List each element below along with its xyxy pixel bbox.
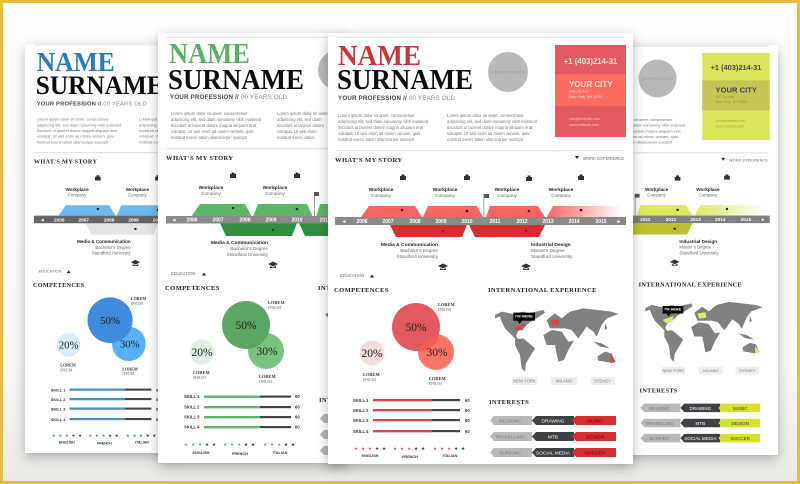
education label [679,239,719,255]
workplace labels: Company [128,193,147,198]
skill bars: SKILL 1 [51,387,66,392]
timeline: 2006 [186,218,198,224]
language ratings: ENGLISH [193,451,210,455]
name heading: NAME [37,47,115,77]
biography text: nostrud exerci tation ullamcorper suscipit [447,137,524,142]
heading: competences: COMPETENCES [334,287,389,294]
timeline: 2009 [265,218,277,224]
contact box: YOUR CITY [569,80,613,89]
skill bars: SKILL 3 [353,418,369,423]
photo placeholder [488,52,528,92]
language ratings: ENGLISH [362,454,379,458]
timeline: 2011 [320,218,331,224]
photo placeholder [318,52,328,88]
workplace labels: Workplace [66,187,89,192]
language ratings [184,442,295,456]
language ratings: ★★★ [223,442,241,448]
workplace labels: Workplace [369,187,394,193]
skill bars: 60 [465,398,470,403]
workplace labels [199,185,288,196]
biography text: volutpat. Ut wisi enim ad minim veniam, quis [37,134,114,139]
language ratings: ★★★ [433,446,451,452]
icon: graduation hat [670,260,679,266]
timeline: 2010 [461,219,473,225]
interest tags: SOCIAL MEDIA [536,450,571,456]
bubble chart: 20% [191,347,213,359]
education legend: EDUCATION [39,269,62,274]
skill bars: 60 [156,417,161,422]
interest tags: TRAVELLING [646,421,674,426]
world map: I'M HERE [664,308,682,312]
skill bars: 60 [295,404,300,410]
bubble chart: IPSUM [429,381,442,386]
workplace labels: Company [551,193,572,198]
interest tags: DESIGN [732,421,749,426]
bubble chart: IPSUM [60,367,73,372]
timeline: ◄ [172,218,176,224]
skill bars: SKILL 2 [51,397,66,402]
language ratings: ★★★ [354,446,372,452]
biography text: nostrud exerci tation ullamcorper suscipit [338,137,415,142]
timeline: 2006 [54,217,65,223]
surname heading: SURNAME [36,70,164,100]
bubble chart: LOREM [193,370,210,375]
location chips [661,367,759,374]
heading: what's my story: WHAT'S MY STORY [166,155,234,162]
bubble chart: 50% [100,315,120,327]
skill bars: SKILL 2 [353,408,369,413]
biography text [171,111,328,140]
biography text: adipiscing elit, sed [139,122,171,127]
education label: Bachelor's Degree [95,245,131,250]
contact box: info@website.com [569,117,600,121]
biography text: adipiscing elit, sed diam nonummy nibh euismod [338,119,429,124]
bubble chart: 30% [256,346,278,358]
photo placeholder: YOUR PHOTO HERE [491,70,526,74]
contact box: +1 (403)214-31 [564,57,618,66]
bubble chart: IPSUM [438,307,451,312]
location chips: NEW YORK [662,368,684,373]
timeline: 2011 [490,219,501,225]
contact box [702,53,770,140]
interest tags: SOCCER [585,450,606,456]
skill bars: 60 [156,406,161,411]
workplace labels: Workplace [126,187,149,192]
skill bars [51,387,161,422]
language ratings: ★★★ [393,446,411,452]
language ratings: ★★ [414,446,425,452]
education label: Industrial Design [679,239,717,244]
interest tags: SOCCER [731,436,751,441]
world map [645,302,762,362]
language ratings: FRENCH [232,452,248,456]
timeline: 2013 [542,219,554,225]
skill bars: 60 [465,429,470,434]
education legend [171,271,206,276]
icon: graduation hat [131,260,140,266]
workplace labels: Workplace [495,187,520,193]
interest tags: DESIGN [586,434,605,440]
workplace labels: Company [435,193,456,198]
timeline: 2011 [640,217,651,223]
contact box: YOUR CITY [716,86,757,95]
biography text: tincidunt ut laoreet dolore magna aliquam erat [447,125,533,130]
education label [211,240,269,257]
biography text: tincidunt ut laoreet dolore magna aliquam erat [338,125,424,130]
bubble chart: IPSUM [193,375,206,380]
language ratings: ★★★ [126,433,143,439]
timeline: 2014 [715,217,726,223]
language ratings: ★★ [375,446,386,452]
workplace labels: Company [201,191,222,196]
contact box: 000 1st Ave [569,90,589,94]
contact box: New York, NY 2000 [716,100,747,104]
workplace labels [645,187,720,198]
skill bars: 60 [295,394,300,399]
profession line: YOUR PROFESSION // 00 YEARS OLD [170,94,287,101]
biography text: nostrud exerci tation ullamcorper suscipit [37,139,109,144]
contact box [555,45,626,137]
panel: blue resume [18,41,158,464]
bubble chart: 20% [361,348,383,360]
biography text: tincidunt ut laoreet dolore magna aliquam erat [600,128,682,133]
interest tags: SOCIAL MEDIA [684,436,717,441]
skill bars: SKILL 4 [51,417,66,422]
heading: international experience: INTERNATIONAL EXPERIENCE [488,287,597,294]
skill bars: SKILL 3 [51,406,66,411]
biography text: volutpat. Ut wisi enim ad minim veniam, quis [171,129,253,134]
language ratings: ★★★ [52,433,69,439]
biography text: Lorem ipsum dolor sit amet [139,117,187,122]
timeline: 2014 [568,219,580,225]
timeline: 2008 [239,218,251,224]
workplace labels: Workplace [549,187,574,193]
world map [495,308,618,372]
name heading: NAME [169,38,250,70]
skill bars: 60 [465,418,470,423]
bubble chart: 50% [405,322,427,334]
bubble chart [57,296,146,376]
education labels [381,242,573,259]
bubble chart: 50% [235,320,257,332]
photo placeholder [639,60,677,97]
biography text: volutpat. Ut wisi enim ad minim veniam, quis [447,131,529,136]
language ratings: ★★★ [88,433,106,439]
location chips: SYDNEY [594,378,611,384]
biography text: volutpat. Ut wisi enim ad minim veniam, quis [600,134,678,139]
education labels: Industrial Design [531,242,571,248]
biography text [338,113,538,142]
interest tags: MTB [696,421,705,426]
heading: competences: COMPETENCES [33,282,85,289]
heading: interests: INTERESTS [640,387,678,394]
biography text: nostrud exerci tation ullamcorper suscipit [600,140,673,145]
bubble chart: IPSUM [131,301,143,306]
language ratings: ITALIAN [273,451,288,455]
timeline: 2008 [409,219,421,225]
language ratings: ENGLISH [59,441,75,445]
biography text: volutpat. Ut wisi enim [277,129,317,134]
bubble chart: IPSUM [363,377,376,382]
workplace labels: Workplace [645,187,669,192]
contact box: New York, NY 2000 [569,95,602,99]
language ratings: ★★ [244,442,255,448]
biography text: Lorem ipsum dolor sit amet, consectetuer [447,113,524,118]
language ratings: ★★★ [184,442,202,448]
education label: Media & Communication [77,239,131,244]
panel: yellow resume [600,45,778,455]
legend: work experience: WORK EXPERIENCE [729,158,768,163]
location chips: NEW YORK [513,378,536,384]
skill bars: 60 [156,397,161,402]
surname heading: SURNAME [168,65,304,96]
workplace labels: Company [647,193,667,198]
bubble chart: LOREM [429,376,446,381]
education labels: Media & Communication [381,242,438,248]
biography text: tincidunt ut laoreet dolore magna aliquam erat [171,123,257,128]
interest tags: MTB [548,434,558,440]
bubble chart: LOREM [438,302,455,307]
education label [77,239,132,256]
icons: graduation hats [438,264,531,270]
language ratings: FRENCH [97,442,112,446]
legend: work experience: WORK EXPERIENCE [583,156,624,161]
heading: competences: COMPETENCES [165,285,220,292]
skill bars [353,398,470,434]
workplace labels: Workplace [263,185,288,191]
timeline [34,175,158,234]
workplace labels: Company [699,193,718,198]
contact box: www.website.com [569,123,599,127]
location chips: MILANO [703,368,718,373]
education label: Standford University [92,251,132,256]
biography text: adipiscing elit, sed diam nonummy nibh euismod [447,119,538,124]
bubble chart: IPSUM [268,305,281,310]
biography text: adipiscing elit, sed diam nonummy nibh euismod [37,122,121,127]
timeline: ► [761,218,765,223]
interest tags: MUSIC [587,418,603,424]
bubble chart: LOREM [131,296,146,301]
interest tags fragment [320,414,350,455]
education label: Master's Degree [679,245,712,250]
interest tags [640,404,760,442]
language ratings: FRENCH [402,455,418,459]
timeline: 2006 [356,219,368,225]
heading: interests: INTERESTS [489,399,529,406]
skill bars: 60 [295,414,300,420]
language ratings: ★★ [454,446,465,452]
workplace labels [66,187,149,198]
timeline: ► [617,219,621,225]
timeline: 2015 [741,217,752,223]
biography text [633,118,685,144]
education labels: Standford University [531,254,573,259]
photo placeholder: YOUR PHOTO HERE [641,77,675,81]
language ratings: ★★ [205,442,216,448]
location chips [512,377,615,385]
timeline: 2015 [595,219,607,225]
timeline: 2007 [382,219,394,225]
education label: Media & Communication [211,240,268,246]
heading: what's my story: WHAT'S MY STORY [335,157,403,164]
bubble chart: IPSUM [122,371,135,376]
heading: interests (clipped): INTERESTS [319,397,359,404]
biography text: nostrud exerci tation [277,135,315,140]
interest tags: READING [499,418,521,424]
language ratings: ITALIAN [135,441,149,445]
profession line: YOUR PROFESSION // 00 YEARS OLD [338,95,455,102]
skill bars [184,394,300,430]
contact box: 000 1st Ave [716,95,734,99]
contact box: www.website.com [716,125,744,129]
language ratings [52,434,156,444]
surname heading: SURNAME [337,65,473,96]
biography text: tincidunt ut laoreet dolore [277,123,325,128]
timeline: ◄ [342,219,346,225]
legend: work experience [721,158,768,162]
biography text: nostrud exerci tation ullamcorper suscipit [171,135,248,140]
interest tags: DRAWING [541,418,565,424]
education legend: EDUCATION [340,273,364,278]
biography text: volutpat. Ut wisi [139,134,167,139]
heading: what's my story: WHAT'S MY STORY [34,158,97,165]
interest tags: TRAVELLING [495,434,525,440]
education label: Standford University [227,252,269,257]
education labels: Bachelor's Degree [400,248,438,253]
education label: Standford University [679,250,719,255]
timeline: 2007 [212,218,224,224]
interest tags: READING [649,406,670,411]
timeline [335,174,626,237]
timeline [166,172,328,236]
skill bars: SKILL 4 [353,429,369,434]
biography text: Lorem ipsum dolor sit amet, consectetuer [171,111,248,116]
bubble chart [190,300,285,384]
language ratings: ITALIAN [443,454,458,458]
name heading: NAME [338,40,421,72]
biography text: tincidunt ut laoreet dolore magna aliquam erat [37,128,118,133]
timeline: 2013 [690,217,701,223]
panel: red resume [328,33,633,464]
timeline: 2010 [153,217,164,223]
contact box: +1 (403)214-31 [711,63,761,72]
education legend [38,270,70,274]
timeline: 2012 [516,219,528,225]
interest tags [490,416,616,457]
bubble chart: 20% [59,340,79,352]
biography text: adipiscing elit, sed diam nonummy nibh euismod [600,123,685,128]
biography text: volutpat. Ut wisi enim ad minim veniam, quis [338,131,420,136]
bubble chart [360,302,455,386]
bubble chart: LOREM [60,363,76,368]
bubble chart: 30% [120,339,140,351]
timeline: ◄ [40,218,45,223]
timeline: 2009 [128,217,139,223]
bubble chart: LOREM [268,300,285,305]
biography text: tincidunt ut laoreet [139,128,172,133]
language ratings: ★★ [108,433,119,439]
skill bars: 60 [295,424,300,430]
skill bars: 60 [156,387,161,392]
skill bars: 60 [465,408,470,413]
biography text: adipiscing elit, sed diam nonummy nibh euismod [171,117,262,122]
icon: graduation hat [268,262,278,268]
timeline: 2008 [104,217,115,223]
education label: Bachelor's Degree [230,246,268,251]
heading: international (clipped): INTERNATIONAL EXPERIENCE [318,285,427,292]
biography text: Lorem ipsum dolor sit amet, consectetuer [338,113,415,118]
workplace labels [369,187,574,198]
interest tags: SURFING [649,436,670,441]
location chips: SYDNEY [739,368,756,373]
world map: I'M HERE [515,314,533,319]
skill bars: SKILL 1 [184,394,200,399]
skill bars: SKILL 3 [184,414,200,420]
bubble chart: LOREM [363,372,380,377]
interest tags: MUSIC [733,406,748,411]
timeline: 2012 [666,217,677,223]
language ratings [354,446,465,459]
skill bars: SKILL 1 [353,398,369,403]
biography text: nostrud exerci [139,139,164,144]
bubble chart: LOREM [259,374,276,379]
contact box: info@website.com [716,119,745,123]
language ratings: ★★ [284,442,295,448]
location chips: MILANO [556,378,573,384]
language ratings: ★★ [72,433,82,439]
workplace labels: Company [265,191,286,196]
biography text: adipiscing elit, sed diam [277,117,322,122]
language ratings: ★★ [146,433,156,439]
timeline [621,174,770,234]
workplace labels: Company [68,193,87,198]
profession line: YOUR PROFESSION // 00 YEARS OLD [37,101,147,107]
bubble chart: 30% [426,347,448,359]
map fragment [325,308,340,323]
panel: green resume [151,30,352,474]
workplace labels: Workplace [433,187,458,193]
skill bars: SKILL 4 [184,424,200,430]
language ratings: ★★★ [263,442,281,448]
heading: international experience: INTERNATIONAL EXPERIENCE [639,281,742,288]
biography text: Lorem ipsum dolor sit amet, consectetuer [37,117,110,122]
education labels: Master's Degree [531,248,565,253]
timeline: 2010 [291,218,303,224]
timeline: 2007 [78,217,89,223]
biography text: Lorem ipsum dolor sit amet, consectetuer [600,117,673,122]
interest tags: DRAWING [689,406,712,411]
biography text [36,118,158,144]
education labels: Standford University [397,254,439,259]
workplace labels: Workplace [199,185,224,191]
bubble chart: IPSUM [259,379,272,384]
interest tags: SURFING [499,450,521,456]
workplace labels: Company [497,193,518,198]
bubble chart: LOREM [122,366,138,372]
skill bars: SKILL 2 [184,404,200,410]
workplace labels: Company [371,193,392,198]
timeline: 2009 [435,219,447,225]
biography text: Lorem ipsum dolor sit amet [277,111,328,116]
education legend: EDUCATION [171,271,195,276]
workplace labels: Workplace [696,187,720,192]
